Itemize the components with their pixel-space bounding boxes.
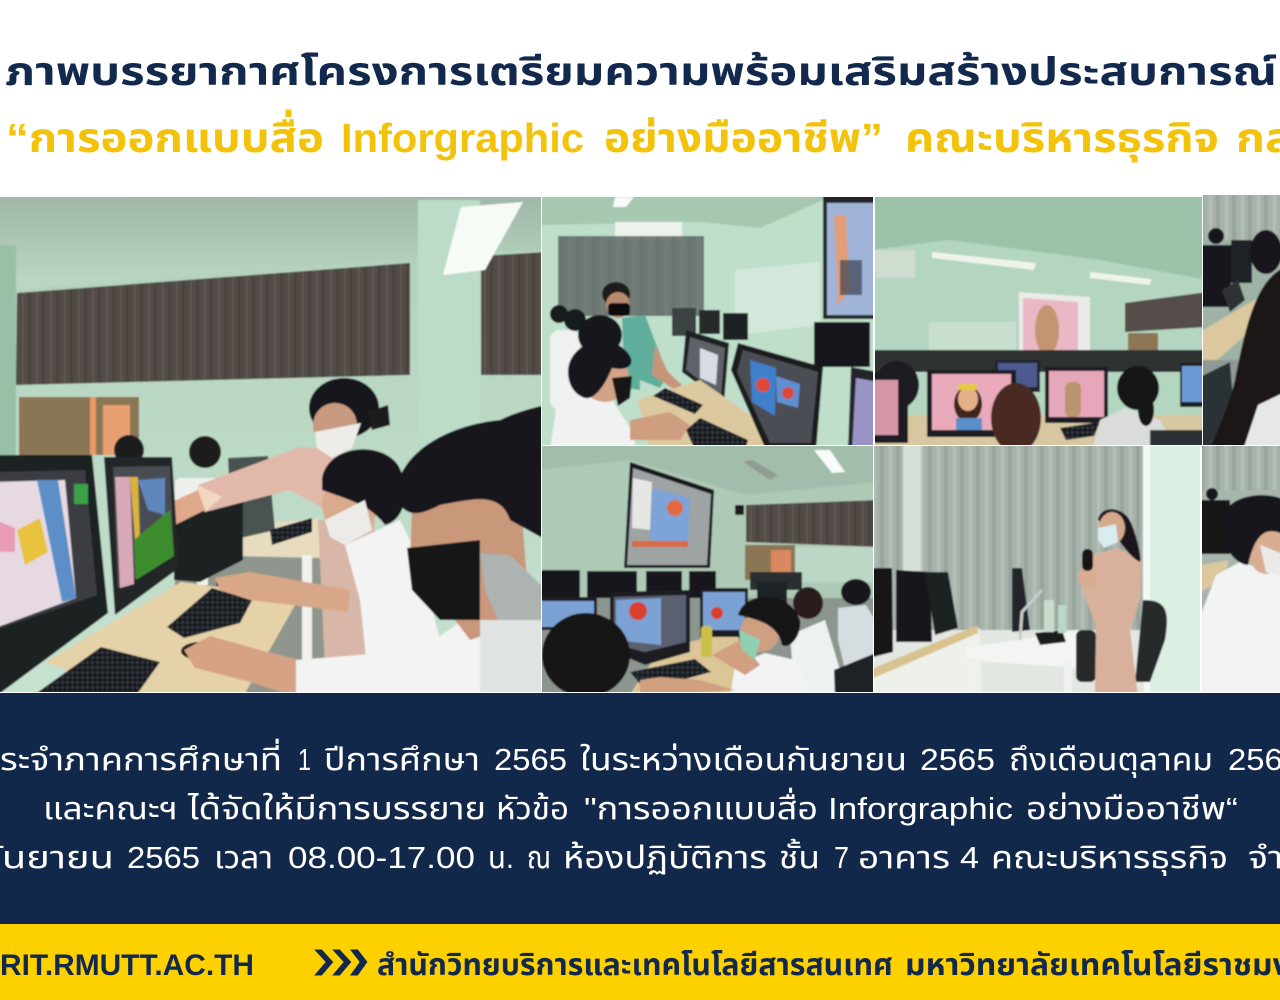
screen orange circle <box>667 500 683 516</box>
chair <box>834 652 878 697</box>
wall <box>537 192 878 450</box>
poster 2 <box>776 376 800 408</box>
light <box>814 450 845 473</box>
curtain right <box>481 252 546 375</box>
mask <box>1098 524 1118 548</box>
monitor 2 screen <box>113 466 174 588</box>
front student hair <box>568 341 631 398</box>
info text line 3: เวลา <box>214 840 273 875</box>
far monitors <box>750 572 802 590</box>
ceiling <box>537 192 878 228</box>
lower dark <box>1198 360 1243 450</box>
third student head <box>793 587 823 619</box>
info text line 2 <box>43 787 1238 826</box>
woman brown hair <box>991 383 1041 453</box>
monitor 2 body <box>104 457 179 615</box>
monitor 1 <box>1198 245 1231 307</box>
footer organisation name <box>377 949 1280 983</box>
black monitor <box>814 322 870 367</box>
monitor dark 3 <box>925 572 958 635</box>
title line 1: ภาพบรรยากาศโครงการเตรียมความพร้อมเสริมสร้างประสบการณ์ <box>5 51 1277 94</box>
info text line 3: น. <box>488 840 514 875</box>
curtain dark <box>558 236 704 316</box>
chair <box>1150 430 1207 450</box>
seated dark person <box>875 361 919 409</box>
keyboard <box>630 659 711 690</box>
wall <box>1198 240 1280 450</box>
background monitors <box>228 456 275 540</box>
front student hand <box>184 636 300 697</box>
back student head 2 <box>564 309 586 331</box>
student ponytail <box>1138 394 1154 426</box>
keyboard 1 <box>653 388 703 414</box>
poster red <box>629 602 647 620</box>
title line 2: คณะบริหารธุรกิจ <box>905 115 1219 163</box>
third student shirt <box>790 620 843 697</box>
middle student shirt <box>345 520 440 697</box>
keyboard 2 <box>686 418 748 450</box>
foreground glasses <box>480 553 546 633</box>
info text line 1: 2565 <box>494 742 567 777</box>
front student face <box>581 354 629 402</box>
face <box>1248 526 1280 574</box>
background person shirt <box>174 478 216 501</box>
desk band <box>870 415 1207 450</box>
screen stripes <box>840 260 862 295</box>
speaker <box>735 505 744 515</box>
bottle <box>701 626 712 657</box>
background desk <box>242 518 320 559</box>
monitor dark 1 <box>869 568 893 658</box>
desk top <box>869 625 978 680</box>
ceiling <box>0 197 541 247</box>
lower area <box>537 598 878 697</box>
woman hair <box>954 386 982 422</box>
long hair <box>1210 267 1280 450</box>
door pane <box>103 405 130 455</box>
door <box>1128 333 1158 355</box>
back monitors row <box>537 570 580 597</box>
back students <box>550 330 580 410</box>
teacher skirt <box>318 520 375 668</box>
mouse back <box>216 579 242 589</box>
second poster red <box>711 607 723 619</box>
microphone stand <box>1020 590 1042 640</box>
screen image <box>827 203 878 315</box>
monitor 2 <box>682 330 729 403</box>
teacher head <box>602 282 630 306</box>
info text line 2: อย่างมืออาชีพ“ <box>1026 791 1238 826</box>
info text line 1: ระจำภาคการศึกษาที่ <box>0 738 282 777</box>
footer url: RIT.RMUTT.AC.TH <box>0 949 254 982</box>
front student shirt <box>730 653 815 697</box>
teacher bow <box>367 405 390 430</box>
ceiling lights 1 <box>932 252 1036 270</box>
face <box>1099 512 1125 544</box>
bottles <box>1044 600 1054 632</box>
back head <box>1206 488 1218 500</box>
mouse front <box>181 642 219 660</box>
seated student head <box>578 315 622 355</box>
back row monitor <box>995 360 1040 392</box>
back row dark band <box>870 350 1207 372</box>
big monitor screen <box>737 350 818 443</box>
screen inner <box>627 468 711 565</box>
ceiling <box>537 441 878 495</box>
photo panel: speaker with microphone by curtain <box>869 441 1205 697</box>
monitor 2 blue panel <box>138 478 165 515</box>
photo panel: classroom with teacher in green shirt <box>537 192 878 450</box>
wall lower <box>795 547 878 582</box>
background keyboard <box>270 518 312 545</box>
screen image <box>1023 298 1078 355</box>
white column <box>1143 441 1205 697</box>
desk <box>1197 560 1228 594</box>
curtain <box>746 500 878 547</box>
teacher mask <box>315 423 361 458</box>
teacher cuff <box>195 485 222 512</box>
curtain <box>1198 190 1280 255</box>
monitor 1 screen <box>0 470 97 630</box>
student arm <box>712 640 760 675</box>
monitor <box>1197 500 1230 554</box>
screen blue poster <box>650 488 690 545</box>
background desk leg right <box>302 555 312 660</box>
desk <box>638 380 800 450</box>
desk <box>628 630 760 697</box>
microphone <box>1082 549 1093 571</box>
back head <box>1208 228 1224 244</box>
second monitor <box>1045 367 1108 423</box>
right edge screen <box>1182 366 1207 402</box>
keyboard 2 <box>31 647 160 697</box>
background person head 1 <box>113 434 145 458</box>
keyboard 1 <box>167 588 252 638</box>
monitor 2 poster <box>700 348 718 385</box>
photo panel: student side view, right strip <box>1197 441 1280 697</box>
wall <box>1197 490 1280 697</box>
second bottle <box>1058 605 1066 633</box>
curtain <box>1125 292 1207 332</box>
wall column <box>418 200 480 312</box>
left edge screen <box>870 380 898 435</box>
light <box>613 197 634 207</box>
background person head 2 <box>189 436 221 468</box>
back monitor 3 <box>723 313 748 340</box>
projector screen <box>624 462 714 568</box>
front student shirt <box>296 610 546 697</box>
poster 1 <box>750 360 776 416</box>
info text line 3 <box>0 838 1280 876</box>
teacher face <box>606 292 630 318</box>
foreground head <box>542 613 630 697</box>
foreground shirt <box>480 620 546 697</box>
back row screen <box>998 363 1037 387</box>
main monitor <box>927 370 1016 437</box>
middle student hair <box>322 449 405 525</box>
info text line 1: ถึงเดือนตุลาคม <box>1009 742 1213 778</box>
ceiling lights 2 <box>1090 272 1151 285</box>
seated student shirt <box>560 370 600 430</box>
front student mask <box>612 376 632 406</box>
floor shade <box>174 556 326 692</box>
photo panel: students working with projector <box>537 441 878 697</box>
info text line 2: หัวข้อ <box>496 791 569 826</box>
left wall shade <box>0 245 16 455</box>
fourth student head <box>841 579 871 605</box>
fourth student shirt <box>838 605 878 670</box>
screen white panel <box>632 478 652 530</box>
footer band <box>0 924 1280 1000</box>
back monitor <box>646 571 682 598</box>
monitor left <box>537 597 597 630</box>
projector screen <box>1019 292 1090 355</box>
screen figure <box>834 215 850 305</box>
monitor main screen <box>614 595 686 652</box>
back monitor 2 <box>699 310 720 334</box>
info text line 1: 2565 <box>920 742 995 777</box>
table leg left <box>968 658 976 697</box>
room wall <box>0 242 541 692</box>
poster 2 red <box>782 387 794 399</box>
background desk legs <box>196 577 209 586</box>
right edge monitor <box>1180 363 1207 407</box>
chair back <box>1135 600 1167 682</box>
info text line 3: 4 <box>960 840 979 875</box>
table leg right <box>1064 660 1072 697</box>
whiteboard reflection <box>735 262 820 335</box>
info text line 3: ห้องปฏิบัติการ <box>563 840 767 875</box>
student shirt <box>1092 408 1177 450</box>
monitor 1 blue sleeve <box>37 480 76 602</box>
hair <box>1098 509 1141 562</box>
chair <box>1198 362 1233 450</box>
front student mask <box>407 540 480 620</box>
student mask <box>739 630 760 660</box>
student face <box>740 612 780 652</box>
second monitor person <box>1065 382 1081 417</box>
front student hair <box>395 405 546 540</box>
info text line 3: 08.00-17.00 <box>288 840 475 875</box>
monitor left screen <box>537 601 594 627</box>
teacher hand <box>174 490 206 526</box>
wall <box>537 441 878 697</box>
chair side <box>1076 630 1096 682</box>
door pane <box>771 550 791 580</box>
middle student arm <box>215 572 350 612</box>
monitor second screen <box>703 592 745 630</box>
wall <box>870 192 1207 450</box>
back monitor <box>587 571 637 599</box>
info text line 3: ชั้น <box>779 838 820 875</box>
projector screen <box>823 192 878 319</box>
desk <box>1198 282 1280 362</box>
right edge monitor <box>848 367 878 450</box>
white shirt <box>1243 392 1280 450</box>
teacher face <box>312 402 358 434</box>
front hand <box>640 677 735 697</box>
title line 2: “การออกแบบสื่อ <box>6 109 324 161</box>
monitor 1 green thumb <box>74 484 88 504</box>
photo panel: woman with long hair, right strip <box>1198 190 1280 450</box>
back monitor <box>689 571 716 598</box>
front student arm <box>630 412 690 440</box>
info text line 2: และคณะฯ <box>43 791 178 826</box>
big monitor <box>731 343 823 450</box>
info text line 3: คณะบริหารธุรกิจ <box>991 840 1228 876</box>
ceiling <box>870 192 1207 280</box>
monitor dark 2 <box>896 570 932 642</box>
fixture <box>743 460 778 480</box>
screen person <box>1035 305 1059 355</box>
poster 1 red <box>756 378 770 392</box>
monitor 2 pink panel <box>115 477 134 588</box>
monitor 1 body <box>0 455 108 697</box>
desk <box>45 582 299 697</box>
door <box>745 545 795 580</box>
right edge screen pink <box>852 378 878 450</box>
keyboard <box>1035 630 1066 645</box>
monitor stand <box>1222 280 1245 312</box>
teacher arm <box>652 345 682 390</box>
hair <box>1222 495 1280 565</box>
title line 2: Inforgraphic <box>341 115 584 161</box>
left fixture <box>875 250 915 278</box>
ceiling light <box>443 202 523 275</box>
curtain <box>869 441 1145 646</box>
front student shirt <box>550 395 635 450</box>
door window <box>90 397 96 455</box>
monitor 2 screen <box>686 337 725 396</box>
title line 2 <box>6 109 1280 163</box>
left edge monitor <box>870 372 908 443</box>
student hair <box>738 597 800 646</box>
poster <box>616 598 661 645</box>
title line 2: อย่างมืออาชีพ” <box>604 115 883 161</box>
monitor 1 image <box>0 480 76 628</box>
teacher mask <box>608 303 630 316</box>
curtain left <box>16 263 410 385</box>
student hair <box>1117 366 1159 410</box>
seated dark person <box>174 495 243 582</box>
monitor 1 pink note <box>0 520 15 552</box>
monitor second <box>700 588 748 637</box>
second monitor screen <box>1049 371 1104 417</box>
column bright edge <box>1143 441 1150 697</box>
info text line 3: 7 <box>834 840 849 875</box>
monitor 2 stand <box>120 612 172 637</box>
back monitor 1 <box>672 308 696 336</box>
teacher hair <box>309 378 379 438</box>
info text line 1: ในระหว่างเดือนกันยายน <box>580 742 907 777</box>
icon: triple chevron arrows <box>313 949 368 976</box>
cabinet <box>869 628 982 697</box>
third monitors <box>757 582 787 604</box>
front student face <box>410 490 530 640</box>
middle student mask <box>325 500 372 545</box>
teacher blouse arm <box>198 446 340 514</box>
info text line 2: Inforgraphic <box>828 791 1013 826</box>
monitor 2 green panel <box>134 510 174 580</box>
monitor 2 yellow panel <box>130 477 140 540</box>
info text line 1: ปีการศึกษา <box>324 742 480 777</box>
dress <box>1082 548 1142 697</box>
door <box>19 397 139 455</box>
whiteboard <box>929 322 1016 355</box>
info text line 3: ณ <box>527 840 551 875</box>
info text line 3: อาคาร <box>858 840 950 875</box>
thin monitor <box>1012 568 1030 632</box>
footer organisation name: สำนักวิทยบริการและเทคโนโลยีสารสนเทศ <box>377 949 893 982</box>
info text line 1 <box>0 738 1280 778</box>
teacher green shirt <box>622 315 668 390</box>
lower wall <box>869 630 1144 697</box>
photo panel: lecture room with pink projector screen <box>870 192 1207 453</box>
middle student face <box>322 477 378 533</box>
info text line 2: "การออกแบบสื่อ <box>584 787 818 826</box>
white table <box>967 630 1078 668</box>
back student head <box>550 305 568 323</box>
screen orange bar <box>632 541 688 547</box>
info text line 3: 2565 <box>127 840 200 875</box>
info text line 1: 1 <box>298 742 311 777</box>
info band background <box>0 693 1280 924</box>
woman headband <box>958 384 977 390</box>
curtain <box>1197 441 1280 496</box>
student head <box>1250 230 1280 274</box>
hand with mic <box>1078 566 1098 588</box>
woman shirt <box>956 418 982 430</box>
monitor main <box>610 590 690 665</box>
mask <box>1260 545 1280 578</box>
shirt <box>1197 562 1280 697</box>
window strip <box>903 441 921 571</box>
photo panel: teacher pointing at student monitor <box>0 192 546 697</box>
info text line 2: ได้จัดให้มีการบรรยาย <box>187 791 486 826</box>
AC unit <box>615 222 682 241</box>
monitor 1 sticky note <box>17 518 48 565</box>
monitor 2 <box>1231 240 1252 283</box>
main monitor screen <box>932 374 1011 430</box>
keyboard <box>1060 422 1100 440</box>
curtain <box>558 236 704 316</box>
woman face <box>958 387 978 411</box>
